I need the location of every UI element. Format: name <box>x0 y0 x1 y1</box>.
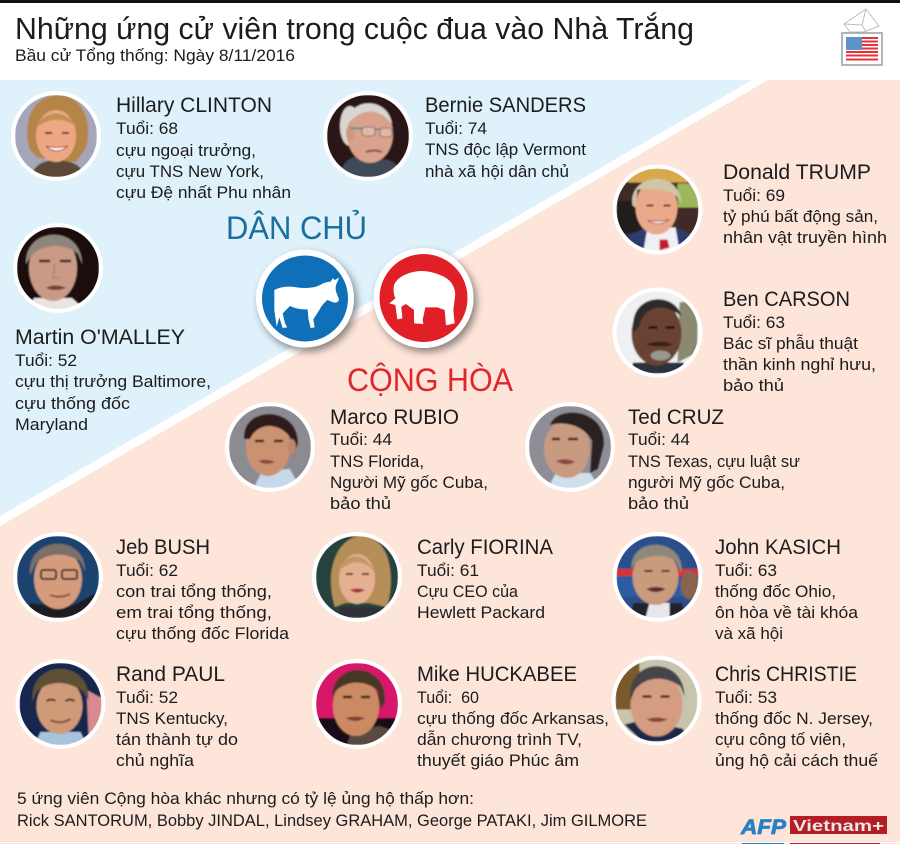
candidate: Hillary Clinton <box>11 91 291 202</box>
candidate: Rand Paul: Rand PAUL <box>116 662 225 686</box>
candidate: Bernie Sanders: Tuổi: 74 <box>425 119 487 138</box>
icon: ballot box with flag <box>842 9 882 65</box>
portrait: Hillary Clinton <box>11 91 101 181</box>
portrait: Bernie Sanders <box>323 91 413 181</box>
candidate: Marco Rubio: bảo thủ <box>330 494 391 513</box>
candidate: Donald Trump: Tuổi: 69 <box>723 186 785 205</box>
candidate: Martin O'Malley: Maryland <box>15 415 88 434</box>
candidate: Ted Cruz: bảo thủ <box>628 494 689 513</box>
title: Những ứng cử viên trong cuộc đua vào Nhà Trắng <box>15 11 694 46</box>
candidate: Ben Carson: bảo thủ <box>723 376 784 395</box>
candidate: Ben Carson <box>612 287 876 395</box>
candidate: John Kasich: Tuổi: 63 <box>715 561 777 580</box>
candidate: John Kasich: thống đốc Ohio, <box>715 582 836 601</box>
candidate: Mike Huckabee: dẫn chương trình TV, <box>417 730 582 749</box>
candidate: Hillary Clinton: cựu ngoại trưởng, <box>116 141 256 160</box>
candidate: Jeb Bush: cựu thống đốc Florida <box>116 624 290 643</box>
portrait: Chris Christie <box>612 656 702 746</box>
background: Democratic area <box>0 80 760 521</box>
candidate: Donald Trump: Donald TRUMP <box>723 160 871 184</box>
portrait: Rand Paul <box>16 659 106 749</box>
candidate: John Kasich <box>612 532 859 643</box>
candidate: Ted Cruz: Tuổi: 44 <box>628 430 690 449</box>
portrait: Marco Rubio <box>225 402 315 492</box>
portrait: Ted Cruz <box>525 402 615 492</box>
candidate: Bernie Sanders: nhà xã hội dân chủ <box>425 162 569 181</box>
candidate: John Kasich: và xã hội <box>715 624 783 643</box>
logo: Vietnam+: Vietnam+ <box>793 818 884 835</box>
candidate: Mike Huckabee <box>312 659 609 770</box>
footnote: other Republican candidates: Rick SANTORUM, Bobby JINDAL, Lindsey GRAHAM, George PATAKI, Jim GILMORE <box>17 811 647 830</box>
candidate: Martin O'Malley: cựu thống đốc <box>15 394 131 413</box>
portrait: Jeb Bush <box>13 532 103 622</box>
candidate: Ben Carson: Tuổi: 63 <box>723 313 785 332</box>
portrait: Mike Huckabee <box>312 659 402 749</box>
candidate: John Kasich: ôn hòa về tài khóa <box>715 603 859 622</box>
candidate: Mike Huckabee: cựu thống đốc Arkansas, <box>417 709 609 728</box>
candidate: Martin O'Malley: Tuổi: 52 <box>15 351 77 370</box>
candidate: Ted Cruz: TNS Texas, cựu luật sư <box>628 452 800 471</box>
candidate: Carly Fiorina: Carly FIORINA <box>417 535 554 559</box>
candidate: Bernie Sanders: TNS độc lập Vermont <box>425 140 586 159</box>
candidate: Marco Rubio: Tuổi: 44 <box>330 430 392 449</box>
candidate: Carly Fiorina: Tuổi: 61 <box>417 561 479 580</box>
candidate: Ben Carson: Ben CARSON <box>723 287 850 311</box>
logo: Vietnam+ <box>790 816 887 835</box>
candidate: Ted Cruz: người Mỹ gốc Cuba, <box>628 473 785 492</box>
candidate: Donald Trump: nhân vật truyền hình <box>723 228 887 247</box>
portrait: Ben Carson <box>612 288 702 378</box>
candidate: Chris Christie <box>612 656 879 770</box>
candidate: Hillary Clinton: Hillary CLINTON <box>116 93 272 117</box>
candidate: Carly Fiorina: Hewlett Packard <box>417 603 545 622</box>
candidate: Carly Fiorina: Cựu CEO của <box>417 582 519 601</box>
candidate: Martin O'Malley: Martin O'MALLEY <box>15 325 185 349</box>
candidate: Jeb Bush: em trai tổng thống, <box>116 603 272 622</box>
candidate: Ted Cruz <box>525 402 800 513</box>
subtitle: Bầu cử Tổng thống: Ngày 8/11/2016 <box>15 46 295 65</box>
candidate: Jeb Bush: Jeb BUSH <box>116 535 210 559</box>
candidate: Marco Rubio: TNS Florida, <box>330 452 424 471</box>
candidate: Rand Paul: TNS Kentucky, <box>116 709 228 728</box>
party label: Cộng Hòa: CỘNG HÒA <box>347 362 514 398</box>
candidate: Donald Trump: tỷ phú bất động sản, <box>723 207 878 226</box>
candidate: Mike Huckabee: Mike HUCKABEE <box>417 662 577 686</box>
portrait: John Kasich <box>612 532 702 622</box>
candidate: Chris Christie: ủng hộ cải cách thuế <box>715 751 879 770</box>
footnote: other Republican candidates: 5 ứng viên Cộng hòa khác nhưng có tỷ lệ ủng hộ thấp hơn: <box>17 789 474 808</box>
candidate: Rand Paul: tán thành tự do <box>116 730 238 749</box>
candidate: Carly Fiorina <box>312 532 554 622</box>
icon: donkey <box>256 250 354 348</box>
candidate: Ben Carson: Bác sĩ phẫu thuật <box>723 334 858 353</box>
candidate: Chris Christie: Tuổi: 53 <box>715 688 777 707</box>
candidate: Chris Christie: thống đốc N. Jersey, <box>715 709 873 728</box>
candidate: Hillary Clinton: Tuổi: 68 <box>116 119 178 138</box>
candidate: Ted Cruz: Ted CRUZ <box>628 405 724 429</box>
candidate: Ben Carson: thần kinh nghỉ hưu, <box>723 355 876 374</box>
candidate: Rand Paul <box>16 659 238 770</box>
candidate: Jeb Bush: con trai tổng thống, <box>116 582 272 601</box>
candidate: Marco Rubio <box>225 402 488 513</box>
candidate: Donald Trump <box>612 160 887 254</box>
portrait: Martin O'Malley <box>13 223 103 313</box>
candidate: Mike Huckabee: thuyết giáo Phúc âm <box>417 751 579 770</box>
logo: AFP: AFP <box>740 816 787 839</box>
candidate: Martin O'Malley <box>13 223 211 434</box>
candidate: Jeb Bush: Tuổi: 62 <box>116 561 178 580</box>
candidate: Martin O'Malley: cựu thị trưởng Baltimore, <box>15 372 211 391</box>
candidate: Hillary Clinton: cựu Đệ nhất Phu nhân <box>116 183 291 202</box>
party label: Dân Chủ: DÂN CHỦ <box>226 210 367 246</box>
icon: elephant <box>374 248 474 348</box>
candidate: Jeb Bush <box>13 532 290 643</box>
candidate: Marco Rubio: Người Mỹ gốc Cuba, <box>330 473 488 492</box>
candidate: Bernie Sanders: Bernie SANDERS <box>425 93 586 117</box>
candidate: Rand Paul: Tuổi: 52 <box>116 688 178 707</box>
candidate: Chris Christie: Chris CHRISTIE <box>715 662 857 686</box>
candidate: John Kasich: John KASICH <box>715 535 841 559</box>
footnote: other Republican candidates <box>17 789 647 830</box>
portrait: Donald Trump <box>612 164 702 254</box>
candidate: Rand Paul: chủ nghĩa <box>116 751 195 770</box>
candidate: Chris Christie: cựu công tố viên, <box>715 730 846 749</box>
candidate: Mike Huckabee: Tuổi: 60 <box>417 688 479 707</box>
candidate: Hillary Clinton: cựu TNS New York, <box>116 162 264 181</box>
candidate: Bernie Sanders <box>323 91 586 181</box>
candidate: Marco Rubio: Marco RUBIO <box>330 405 459 429</box>
portrait: Carly Fiorina <box>312 532 402 622</box>
